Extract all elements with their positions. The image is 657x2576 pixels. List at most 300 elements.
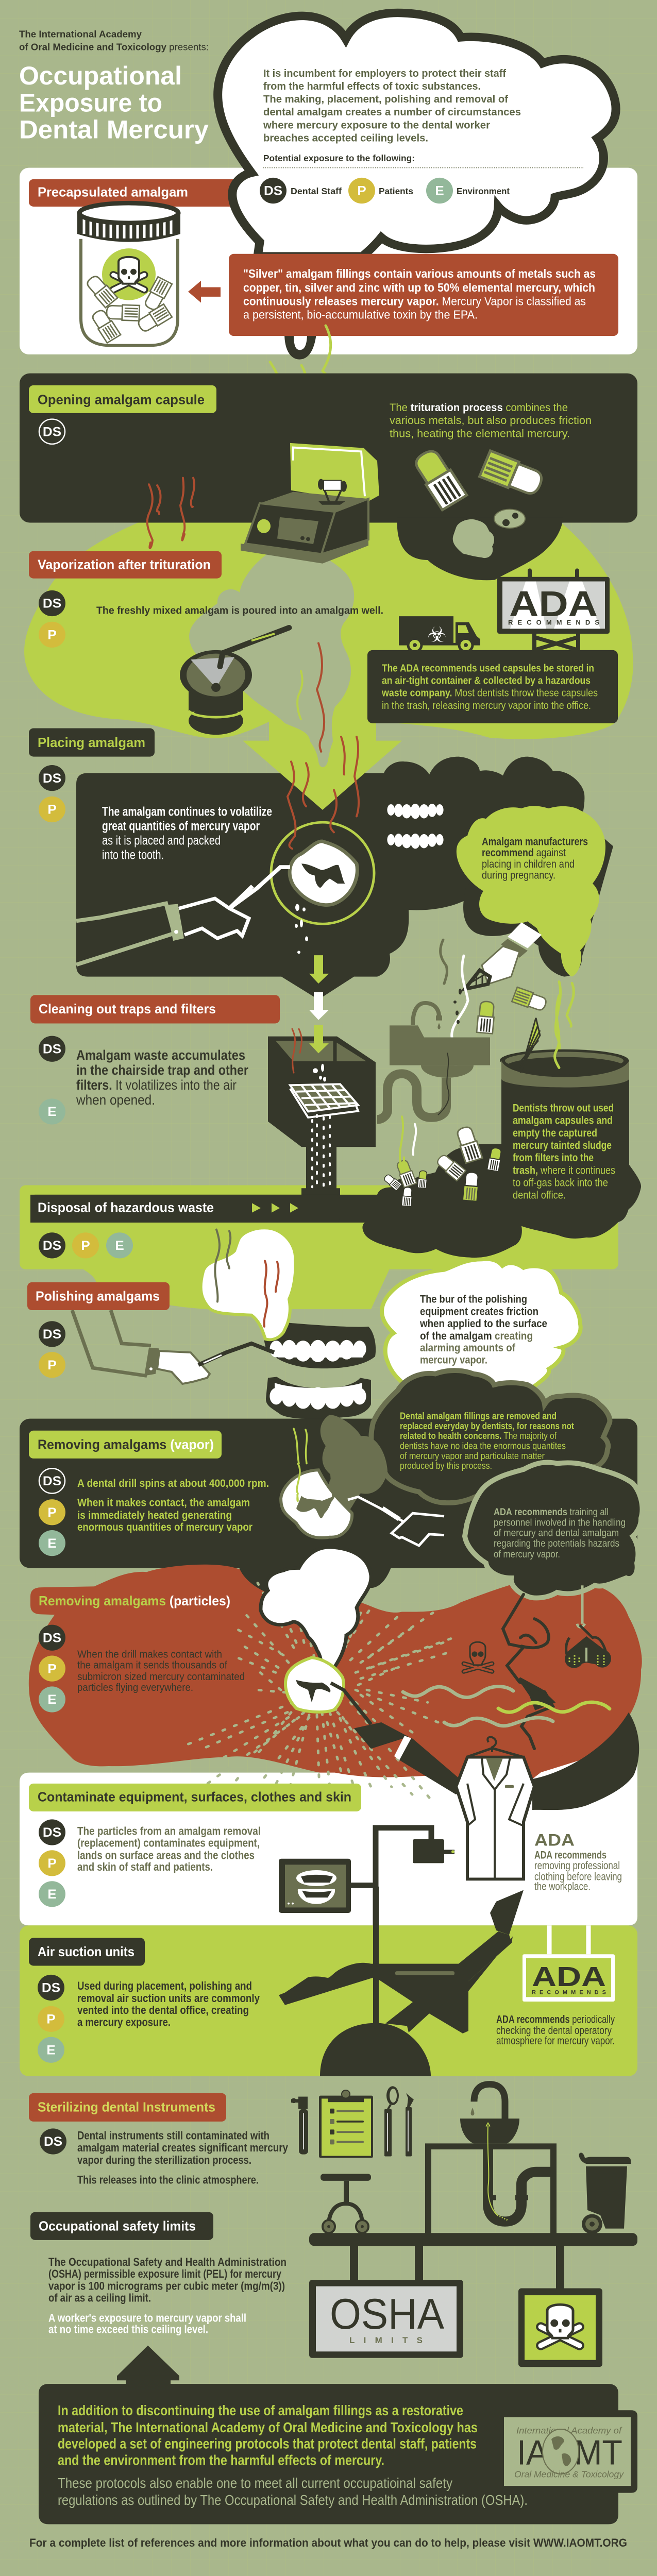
icon: respirator mask [565,1585,611,1668]
intro text [263,67,521,144]
icon: capsule falling [512,987,548,1012]
callout: bur of polishing equipment: The bur of the polishing [420,1293,527,1305]
text: amalgam continues [102,805,272,862]
text: OSHA limits: (OSHA) permissible exposure limit (PEL) for mercury [48,2268,281,2280]
badge: P [39,1656,65,1682]
badge: DS: DS [43,1474,61,1488]
badge: DS: DS [42,1981,60,1995]
panel: placing amalgam [76,757,584,999]
heading: precapsulated amalgam: Precapsulated amalgam [38,184,188,200]
panel: air suction units [20,1925,637,2076]
heading: disposal of hazardous waste: Disposal of hazardous waste [38,1200,214,1215]
heading: polishing amalgams: Polishing amalgams [36,1289,160,1304]
red vapor over lime [147,478,194,548]
icon: capsule falling [477,1001,495,1033]
text: amalgam waste [76,1047,248,1108]
ADA recommends clothing: clothing before leaving [534,1870,622,1883]
badge: DS [39,765,65,791]
text: conclusion: developed a set of engineering protocols that protect dental staff, patients [58,2436,477,2452]
icon: lab coat on hanger [456,1737,534,1879]
callout: ADA recommends training: of mercury and dental amalgam [494,1528,619,1539]
text: OSHA limits: vapor is 100 micrograms per cubic meter (mg/m(3)) [48,2280,285,2292]
icon: capsule in pile [417,1171,428,1188]
badge: E [106,1232,133,1259]
badge: DS: DS [44,2135,62,2149]
callout: bur of polishing equipment [382,1259,581,1389]
icon: faucet [471,2084,505,2119]
badge: DS: DS [43,1826,61,1840]
callout: amalgam fillings replaced: related to health concerns. The majority of [400,1431,557,1441]
callout: silver amalgam: continuously releases mercury vapor. Mercury Vapor is classified as [243,295,586,308]
badge: E: E [47,1693,57,1707]
text: dental instruments: amalgam material creates significant mercury [77,2141,288,2154]
text: dentists throw: amalgam capsules and [513,1114,613,1127]
badge: DS [39,1819,65,1845]
legend: dental staff: DS [264,184,282,198]
icon: capsule in pile [435,1153,466,1181]
header credit [19,29,209,53]
text: air suction: vented into the dental office, creating [77,2004,249,2016]
callout: silver amalgam [229,254,618,336]
intro text: where mercury exposure to the dental worker [263,120,490,131]
text: amalgam waste: Amalgam waste accumulates [76,1047,245,1063]
text: dentists throw: to off-gas back into the [513,1176,608,1189]
vapor cloud: particles [261,1547,371,1679]
text: particles from removal: lands on surface areas and the clothes [77,1849,255,1862]
ADA recommends clothing: removing professional [534,1859,620,1872]
text: drill makes contact: particles flying everywhere. [77,1682,193,1693]
icon: tooth with filling under drill [285,1657,371,1724]
text: amalgam waste: filters. It volatilizes into the air [76,1077,237,1093]
callout: ADA capsule storage: waste company. Most dentists throw these capsules [381,687,598,699]
badge: DS: DS [43,1631,61,1645]
legend: environment: E [435,184,444,198]
legend: dental staff [260,178,342,204]
dark shadow behind manufacturers cloud [463,806,613,977]
text: ADA recommends periodically: atmosphere for mercury vapor. [496,2034,615,2047]
sign: ADA recommends air [523,1925,615,2002]
text: particles from removal: and skin of staff and patients. [77,1860,213,1873]
legend: patients [348,178,413,204]
icon: amalgam well [180,628,289,737]
badge: DS [39,419,65,444]
text: OSHA limits: A worker's exposure to mercury vapor shall [48,2312,246,2324]
text: particles from removal: The particles from an amalgam removal [77,1825,261,1837]
badge: E [39,1530,65,1556]
sign: OSHA limits: OSHA [330,2290,445,2337]
badge: E: E [47,1105,57,1119]
heading: disposal of hazardous waste [30,1195,340,1223]
text: dental drill [77,1477,269,1533]
header credit: of Oral Medicine and Toxicology presents: [19,42,209,53]
text: OSHA limits: of air as a ceiling limit. [48,2292,151,2304]
callout: amalgam fillings replaced: produced by this process. [400,1461,492,1471]
icon: gloved hand placing amalgam [76,867,290,964]
text: dental drill: is immediately heated generating [77,1509,232,1521]
heading: removing amalgams vapor [29,1431,222,1459]
text: particles from removal [77,1825,261,1873]
icon: dental chair [279,1887,524,2076]
text: conclusion: In addition to discontinuing the use of amalgam fillings as a restorative [58,2402,463,2419]
heading: contaminate equipment: Contaminate equipment, surfaces, clothes and skin [38,1789,351,1805]
heading: cleaning out traps and filters [30,995,280,1023]
icon: dark gloved hand [354,1722,466,1794]
text: dentists throw [513,1101,615,1201]
icon: amalgam jar [77,203,180,346]
callout: amalgam fillings replaced: Dental amalgam fillings are removed and [400,1411,557,1421]
sign: ADA recommends: RECOMMENDS [508,619,599,626]
falling particles [312,1115,330,1187]
icon: hazardous waste truck: ☣ [427,623,447,646]
icon: chairside trap [268,1037,376,1196]
callout: amalgam manufacturers cloud: recommend against [482,846,566,859]
text: amalgam continues: into the tooth. [102,848,164,862]
text: dental drill: enormous quantities of mercury vapor [77,1520,253,1533]
intro text: breaches accepted ceiling levels. [263,132,428,144]
badge: E [39,1098,65,1125]
white panel: contaminate equipment [20,1742,637,1925]
badge: P: P [47,803,57,817]
icon: opened capsule right [480,451,545,498]
badge: DS: DS [43,1327,61,1342]
callout: ADA recommends training: regarding the potentials hazards [494,1538,619,1549]
icon: trash can with text [30,1049,641,1258]
icon: tooth with filling under magnifier [271,822,374,924]
badge: DS [40,2128,66,2155]
sign: ADA recommends air: ADA [532,1961,606,1992]
text: amalgam continues: The amalgam continues to volatilize [102,805,272,819]
callout: amalgam fillings replaced: dentists have no idea the enormous quantites [400,1440,566,1451]
badge: DS: DS [43,1042,61,1056]
text: ADA recommends periodically [496,2013,615,2047]
icon: capsule in pile [487,1147,502,1172]
title [19,61,209,144]
text: dental instruments: Dental instruments still contaminated with [77,2129,269,2142]
intro text: The making, placement, polishing and removal of [263,93,508,105]
callout: amalgam fillings replaced [371,1370,610,1503]
icon: amalgam blob [453,519,494,558]
icon: filter dropping into trash [520,1018,540,1073]
logo: IAOMT: Oral Medicine & Toxicology [514,2469,624,2480]
badge: E [39,1881,65,1907]
text: dentists throw: mercury tainted sludge [513,1139,612,1151]
icon: opened capsule left [411,447,467,510]
vapor cloud inside the lime blob [189,549,354,767]
logo: IAOMT [504,2417,631,2486]
panel: precapsulated amalgam [20,168,637,354]
callout: ADA capsule storage: in the trash, releasing mercury vapor into the office. [382,700,591,711]
heading: vaporization after trituration: Vaporization after trituration [38,557,211,572]
text: conclusion [58,2402,528,2509]
text: dental instruments [77,2129,288,2187]
air flow waves [403,1687,610,1726]
callout: ADA recommends training [465,1462,642,1598]
badge: DS: DS [43,597,61,611]
text: dental instruments: This releases into the clinic atmosphere. [77,2174,259,2187]
badge: E: E [47,1887,57,1902]
panel: opening amalgam capsule [20,374,637,580]
heading: precapsulated amalgam [29,179,250,207]
arrow: down white [309,992,329,1020]
title: Occupational [19,61,182,90]
callout: amalgam manufacturers cloud: placing in children and [482,857,575,870]
cloud tail [284,333,316,360]
callout: amalgam fillings replaced: of mercury vapor and particulate matter [400,1450,545,1461]
legend: environment [426,178,510,204]
logo: IAOMT: IAOMT [517,2433,622,2472]
icon: dental mirror [384,2086,399,2157]
text: drill makes contact: the amalgam it sends thousands of [77,1659,227,1671]
badge: P [38,2006,64,2032]
badge: P: P [47,1358,57,1372]
text: conclusion: material, The International Academy of Oral Medicine and Toxicology has [58,2419,478,2436]
badge: DS: DS [43,1239,61,1253]
badge: E: E [47,1536,57,1551]
callout: bur of polishing equipment: of the amalgam creating [420,1329,533,1342]
text: dental instruments: vapor during the sterillization process. [77,2154,251,2166]
heading: contaminate equipment [29,1784,361,1811]
sign: OSHA limits [309,2280,463,2358]
particles falling [295,904,308,954]
callout: bur of polishing equipment: equipment creates friction [420,1305,538,1318]
icon: mercury sphere [494,509,525,528]
icon: teeth [387,804,444,849]
sign: ADA recommends air: RECOMMENDS [532,1990,606,1995]
heading: sterilizing dental instruments [29,2093,226,2122]
callout: silver amalgam: copper, tin, silver and zinc with up to 50% elemental mercury, which [243,281,595,294]
badge: P: P [47,1857,57,1871]
text: trituration: various metals, but also produces friction [390,414,592,427]
icon: capsule in pile [455,1125,482,1163]
dark smoke at base of vapor [239,1566,392,1593]
text: air suction: removal air suction units are commonly [77,1992,260,2005]
callout: ADA capsule storage: The ADA recommends used capsules be stored in [382,663,594,674]
badge: DS: DS [43,771,61,786]
badge: P [39,1352,65,1378]
badge: DS [39,1468,65,1494]
lime vaporization blob and down arrow [24,522,633,810]
text: OSHA limits: The Occupational Safety and Health Administration [48,2256,287,2268]
text: amalgam waste: in the chairside trap and other [76,1062,248,1078]
callout: amalgam manufacturers cloud: during pregnancy. [482,869,555,881]
intro text: dental amalgam creates a number of circumstances [263,106,521,118]
badge: P: P [46,2012,56,2026]
vapor into trash [555,995,559,1067]
callout: ADA capsule storage: an air-tight container & collected by a hazardous [382,675,591,686]
sign: ADA recommends: ADA [509,584,598,624]
callout: ADA capsule storage [367,650,618,723]
heading: removing amalgams vapor: Removing amalgams (vapor) [38,1437,214,1452]
legend: dental staff: Dental Staff [291,186,342,196]
text: air suction [77,1979,260,2028]
icon: dental probe [406,2093,414,2157]
text: air suction: Used during placement, polishing and [77,1979,252,1992]
ADA recommends clothing: ADA recommends [534,1849,607,1861]
panel: conclusion [39,2346,637,2524]
text: ADA recommends periodically: ADA recommends periodically [496,2013,615,2025]
text: dentists throw: from filters into the [513,1151,594,1164]
heading: air suction units: Air suction units [38,1944,134,1959]
logo: IAOMT: International Academy of [516,2426,622,2436]
header credit: The International Academy [19,29,142,39]
badge: P [72,1232,99,1259]
heading: placing amalgam [29,728,155,757]
badge: E [39,1686,65,1713]
heading: occupational safety limits: Occupational safety limits [39,2218,196,2233]
icon: skull and crossbones [464,1642,492,1671]
ADA recommends clothing: the workplace. [534,1880,591,1893]
callout: ADA recommends training: of mercury vapor. [494,1549,560,1560]
icon: trash bin [579,2153,631,2234]
badge: E [38,2037,64,2063]
heading: sterilizing dental instruments: Sterilizing dental Instruments [38,2099,215,2114]
icon: capsule in pile [401,1187,413,1207]
panel: disposal lime [20,1185,618,1309]
icon: sink and drain [377,1003,490,1120]
intro cloud callout [218,13,616,257]
icon: upper mouth [264,1322,376,1368]
callout: ADA recommends training: personnel involved in the handling [494,1517,626,1528]
text: drill makes contact [77,1649,245,1693]
badge: DS [38,1975,64,2001]
vapor rising from the callout [270,326,334,472]
arrow: down [309,955,329,984]
icon: capsule in pile [463,1172,480,1201]
vapor above pile [400,1116,416,1168]
badge: P: P [47,1505,57,1520]
red overlay at panel top [335,1752,567,1782]
icon: capsule in pile [383,1173,402,1191]
heading: placing amalgam: Placing amalgam [38,735,145,750]
text: conclusion: regulations as outlined by The Occupational Safety and Health Administration (OSHA). [58,2492,528,2509]
icon: tooth with vapor [281,1415,388,1538]
badge: DS [39,1321,65,1347]
text: dentists throw: trash, where it continues [513,1164,615,1176]
text: trituration: thus, heating the elemental mercury. [390,427,570,439]
sign: skull [518,2289,602,2367]
red vapor above tooth [288,737,359,849]
ADA recommends clothing: ADA [534,1831,575,1850]
heading: opening amalgam capsule: Opening amalgam capsule [38,392,205,407]
icon: capsule in pile [395,1159,416,1188]
heading: vaporization after trituration [29,551,222,579]
icon: amalgamator machine [241,443,379,564]
icon: hand with polishing drill [72,1310,274,1384]
title: Dental Mercury [19,115,209,144]
particle scatter [180,1573,453,1802]
badge: DS [39,590,65,616]
arrow and vapor into trap [292,1025,329,1073]
text: dentists throw: empty the captured [513,1126,597,1139]
callout: amalgam manufacturers cloud [457,806,605,977]
text: OSHA limits: at no time exceed this ceiling level. [48,2323,208,2335]
icon: filter grid [290,1084,358,1117]
badge: P [39,1850,65,1876]
legend: patients: P [357,184,366,198]
heading: removing amalgams particles: Removing amalgams (particles) [39,1593,230,1608]
icon: hand emptying filter [465,922,542,989]
callout: bur of polishing equipment: alarming amounts of [420,1342,516,1354]
red particles blob [29,1565,642,1782]
vapor cloud: polishing [201,1228,295,1340]
badge: E: E [115,1239,124,1253]
title: Exposure to [19,88,162,117]
badge: P: P [47,1662,57,1676]
legend heading: Potential exposure to the following: [263,153,415,163]
panel: removing amalgams vapor [20,1419,637,1568]
badge: DS [39,1625,65,1651]
callout: ADA recommends training: ADA recommends training all [494,1506,609,1518]
callout: bur of polishing equipment: mercury vapor. [420,1353,487,1366]
text: amalgam continues: as it is placed and packed [102,834,221,848]
sign: OSHA limits: LIMITS [349,2335,423,2345]
icon: lower mouth [266,1377,371,1420]
heading: cleaning out traps and filters: Cleaning out traps and filters [39,1002,216,1016]
heading: occupational safety limits [30,2212,213,2240]
ADA recommends clothing [534,1831,622,1893]
text: freshly mixed: The freshly mixed amalgam is poured into an amalgam well. [96,605,383,616]
callout: silver amalgam: a persistent, bio-accumulative toxin by the EPA. [243,308,478,321]
text: amalgam continues: great quantities of mercury vapor [102,819,260,833]
text: amalgam waste: when opened. [76,1092,155,1108]
badge: P [39,622,65,648]
icon: stool [321,2174,371,2233]
heading: air suction units [29,1938,145,1965]
text: OSHA limits [48,2256,287,2335]
badge: DS [39,1036,65,1062]
text: ADA recommends periodically: checking the dental operatory [496,2024,612,2037]
icon: nose profile [503,1595,553,1749]
text: dentists throw: dental office. [513,1189,566,1201]
icon: x-ray lightbox and lamp [279,1828,454,1936]
text: dental drill: When it makes contact, the amalgam [77,1496,250,1509]
heading: polishing amalgams [27,1282,170,1310]
legend: environment: Environment [457,186,510,196]
intro text: from the harmful effects of toxic substances. [263,80,481,92]
icon: hazardous waste truck [399,616,480,652]
vapor through arrow [297,643,345,774]
badge: P: P [47,628,57,642]
badge: P [39,796,65,822]
badge: P: P [81,1239,90,1253]
callout: amalgam fillings replaced: replaced everyday by dentists, for reasons not [400,1420,574,1431]
icon: clipboard [319,2090,373,2158]
text: conclusion: and the environment from the harmful effects of mercury. [58,2452,384,2468]
icon: hand with drill outline [348,1497,444,1546]
text: dental drill: A dental drill spins at about 400,000 rpm. [77,1477,269,1489]
text: air suction: a mercury exposure. [77,2016,171,2028]
badge: E: E [46,2043,56,2057]
vapor and debris near the trash [441,940,574,1070]
badge: P [39,1499,65,1525]
badge: DS [39,1232,65,1259]
callout: silver amalgam: "Silver" amalgam fillings contain various amounts of metals such as [243,267,596,280]
heading: opening amalgam capsule [29,385,216,413]
sign: ADA recommends [497,570,610,650]
legend: patients: Patients [379,186,413,196]
text: trituration [390,401,592,439]
text: drill makes contact: When the drill makes contact with [77,1649,222,1660]
arrow: left to jar [188,281,221,302]
callout: amalgam manufacturers cloud: Amalgam manufacturers [482,835,588,848]
text: dentists throw: Dentists throw out used [513,1101,614,1114]
icon: sink cabinet and trap [428,2119,553,2235]
shelf with sign hangers [309,2233,637,2290]
text: drill makes contact: submicron sized mercury contaminated [77,1671,245,1683]
callout: bur of polishing equipment: when applied to the surface [419,1317,547,1330]
badge: DS: DS [43,425,61,439]
intro text: It is incumbent for employers to protect their staff [263,67,506,79]
